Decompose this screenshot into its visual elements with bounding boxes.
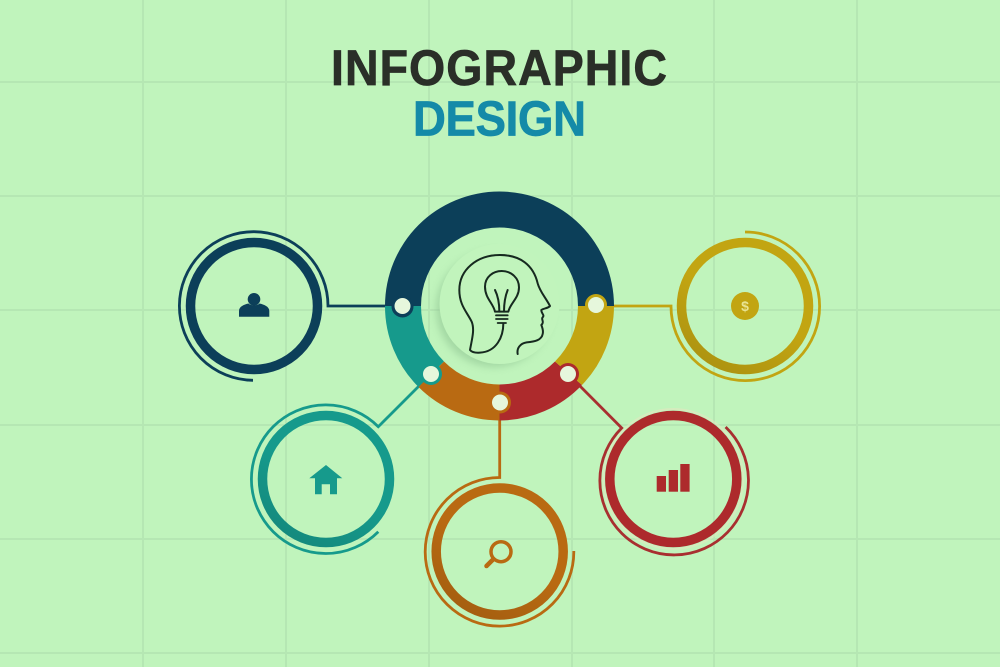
panel: red circle <box>568 374 748 555</box>
connector arc <box>425 403 574 626</box>
icon: head with light bulb <box>459 255 550 354</box>
heading: design: DESIGN <box>413 91 586 146</box>
ring <box>603 409 743 549</box>
node: yellow <box>585 294 607 316</box>
panel: teal circle <box>251 374 431 554</box>
panel: central ring <box>385 192 614 421</box>
ring <box>436 488 563 615</box>
segment: navy <box>385 192 614 306</box>
connector arc <box>251 374 431 554</box>
segment: red <box>500 362 582 420</box>
icon: dollar coin <box>731 292 759 320</box>
connector arc <box>179 232 390 380</box>
segment: orange <box>418 362 500 421</box>
icon: dollar coin: $ <box>741 298 749 314</box>
connector arc <box>568 374 748 555</box>
node: orange <box>489 392 511 414</box>
icon: person <box>239 293 269 317</box>
node: red <box>557 363 579 385</box>
ring <box>682 242 808 370</box>
connector arc <box>610 232 820 381</box>
node: navy <box>392 296 414 318</box>
node: teal <box>420 363 442 385</box>
icon: magnifier <box>486 542 511 566</box>
title <box>331 41 667 146</box>
icon: house <box>309 465 342 494</box>
segment: yellow <box>555 306 614 385</box>
panel: navy circle <box>179 232 390 380</box>
inner disc <box>440 244 560 364</box>
panel: orange circle <box>425 403 574 626</box>
segment: teal <box>385 306 444 387</box>
ring <box>190 242 318 370</box>
icon: bar chart <box>657 464 690 492</box>
panel: yellow circle <box>610 232 820 381</box>
heading: infographic: INFOGRAPHIC <box>331 41 667 96</box>
ring <box>262 416 390 542</box>
inner disc shadow <box>436 251 552 367</box>
